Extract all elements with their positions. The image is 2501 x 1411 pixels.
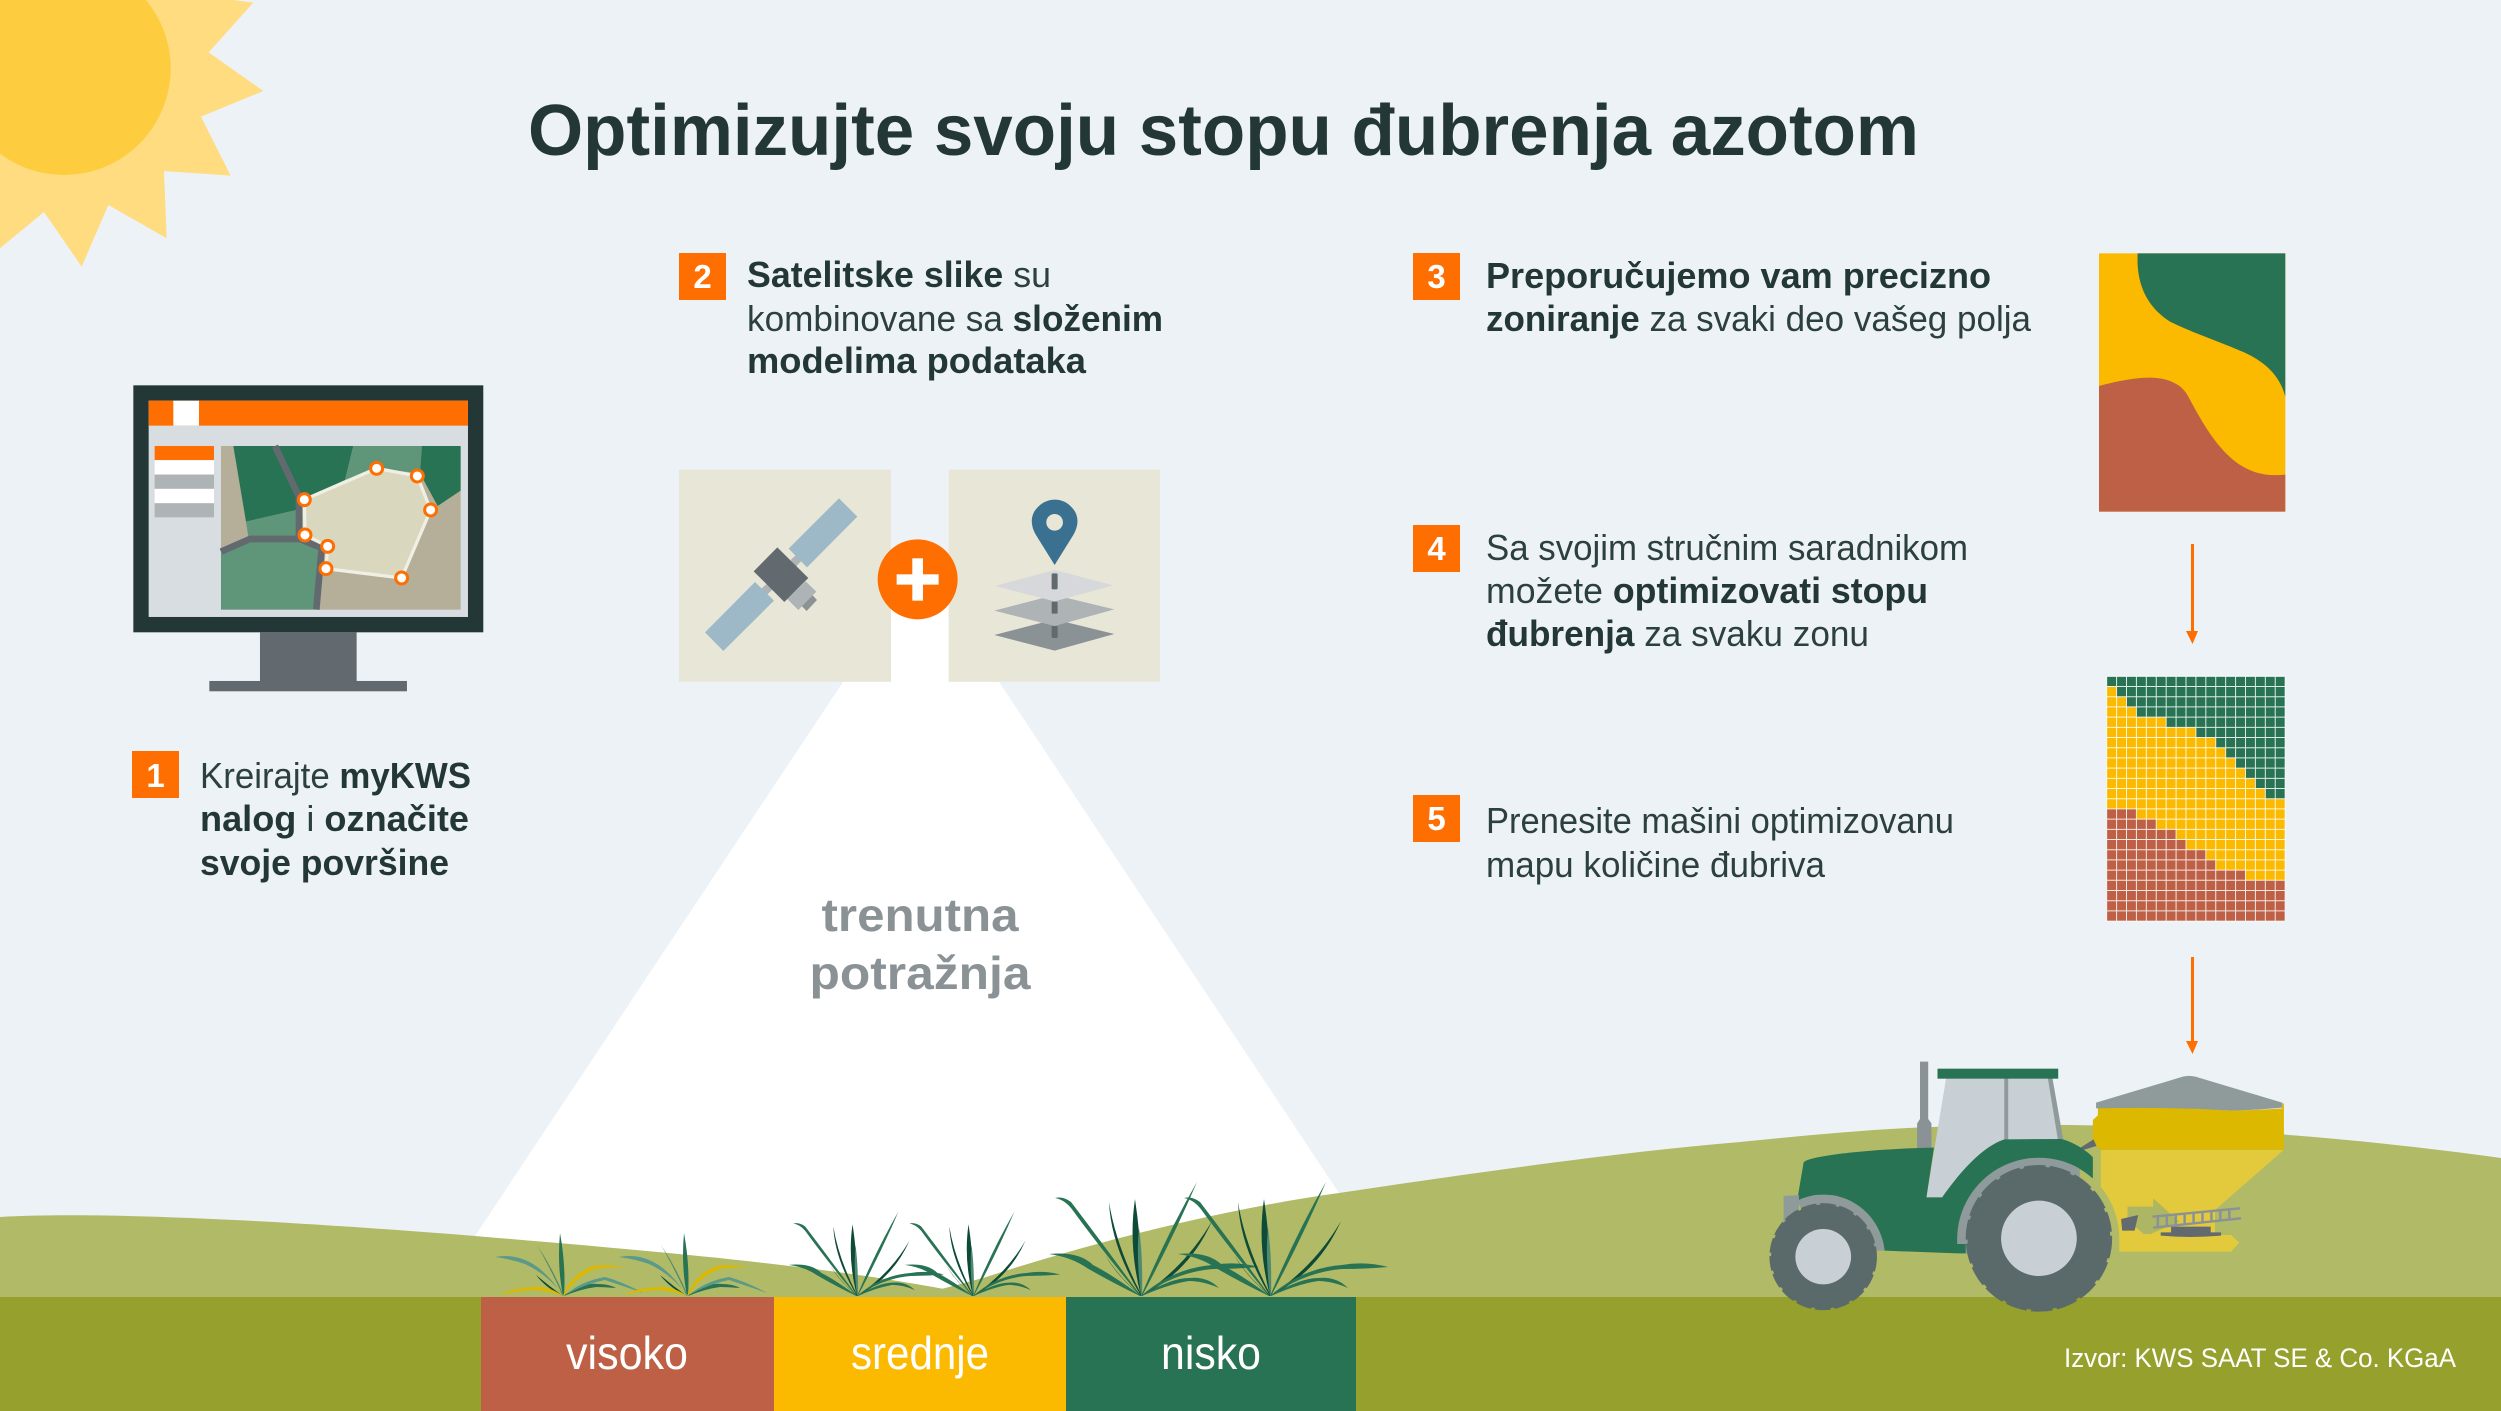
tractor body: [1797, 1139, 2093, 1253]
bar: nisko: nisko: [1161, 1327, 1261, 1379]
step 1 text: nalog i označite: [200, 798, 469, 839]
wheel arches: [1784, 1158, 2119, 1253]
plants: small, high demand: [495, 1233, 767, 1296]
exhaust: [1917, 1062, 1931, 1148]
arrow: grid to spreader: [2186, 957, 2198, 1054]
bar: visoko: visoko: [566, 1327, 688, 1379]
bar: nisko: [1066, 1297, 1356, 1411]
panel: data model: [949, 470, 1160, 682]
cab: [1926, 1069, 2063, 1197]
title: Optimizujte svoju stopu đubrenja azotom: [528, 91, 1919, 171]
step 5 number: [1413, 795, 1460, 842]
step 2 text: Satelitske slike su: [747, 254, 1051, 295]
step 2 text: kombinovane sa složenim: [747, 298, 1163, 339]
icon: plus: [878, 539, 958, 619]
plants: medium demand: [789, 1212, 1060, 1296]
step 1 number: 1: [146, 757, 165, 794]
prescription grid map: [2107, 676, 2285, 921]
plants: large, low demand: [1049, 1182, 1388, 1296]
step 3 text: zoniranje za svaki deo vašeg polja: [1486, 298, 2032, 339]
tractor with fertilizer spreader: [1771, 1062, 2284, 1310]
ground strip: [0, 1297, 2501, 1411]
step 5 number: 5: [1427, 800, 1446, 837]
step 4 text: možete optimizovati stopu: [1486, 570, 1928, 611]
step 2 text: modelima podataka: [747, 340, 1087, 381]
hill: right: [900, 1125, 2501, 1300]
step 1 text: Kreirajte myKWS: [200, 755, 471, 796]
step 4 text: [1486, 527, 1968, 654]
step 5 text: mapu količine đubriva: [1486, 844, 1826, 885]
bar: srednje: srednje: [851, 1327, 989, 1379]
icon: monitor with field map: [133, 385, 483, 691]
hill: left: [0, 1215, 1000, 1300]
satellite and data model panels: [679, 470, 1160, 682]
step 2 number: [679, 253, 726, 300]
step 3 text: [1486, 255, 2032, 339]
icon: sun: [0, 0, 263, 267]
bar: srednje: [774, 1297, 1066, 1411]
rear wheel: [1967, 1167, 2110, 1310]
beam label: [810, 889, 1031, 999]
zone map: [2099, 253, 2285, 512]
front wheel: [1771, 1205, 1875, 1309]
step 1 text: [200, 755, 471, 883]
step 1 number: [132, 751, 179, 798]
step 3 number: 3: [1427, 258, 1446, 295]
light beam: current demand: [460, 600, 1339, 1300]
panel: satellite: [679, 470, 891, 682]
bar: visoko: [481, 1297, 774, 1411]
step 3 number: [1413, 253, 1460, 300]
step 4 number: 4: [1427, 530, 1446, 567]
beam label: potražnja: [810, 947, 1031, 999]
step 2 number: 2: [693, 258, 712, 295]
beam label: trenutna: [822, 889, 1019, 941]
source: Izvor: KWS SAAT SE & Co. KGaA: [2064, 1343, 2456, 1373]
spreader hopper: [2079, 1076, 2284, 1252]
step 2 text: [747, 254, 1163, 381]
step 5 text: Prenesite mašini optimizovanu: [1486, 800, 1954, 841]
step 4 text: Sa svojim stručnim saradnikom: [1486, 527, 1968, 568]
step 5 text: [1486, 800, 1954, 885]
step 1 text: svoje površine: [200, 842, 449, 883]
step 3 text: Preporučujemo vam precizno: [1486, 255, 1991, 296]
step 4 text: đubrenja za svaku zonu: [1486, 613, 1869, 654]
demand scale bars: [481, 1297, 1356, 1411]
arrow: zone map to grid: [2186, 544, 2198, 644]
step 4 number: [1413, 525, 1460, 572]
